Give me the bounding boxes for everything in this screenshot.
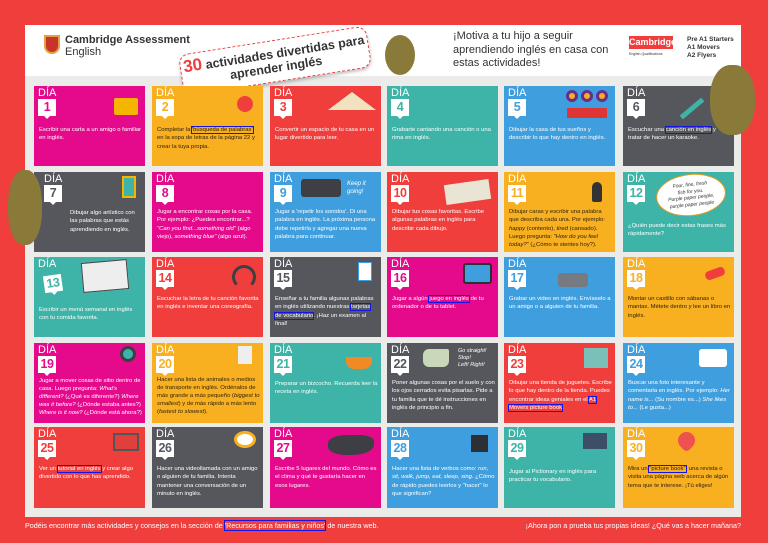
card 7: Dibujar algo artístico con las palabras que estás aprendiendo en inglés. <box>70 210 135 233</box>
card 12: 12 <box>630 186 642 200</box>
card 1: DÍA <box>38 87 56 99</box>
card 21: Preparar un bizcocho. Recuerda leer la receta en inglés. <box>275 381 378 395</box>
card 25: 25 <box>41 441 53 455</box>
speech bubble: tongue twister: purple paper people <box>670 199 714 210</box>
icon: heart and magazine <box>674 428 699 453</box>
card 27: DÍA <box>274 428 292 440</box>
title bubble: 30 actividades divertidas para <box>182 33 365 76</box>
card 13: 13 <box>46 275 60 291</box>
icon: microphone <box>680 98 704 119</box>
card 18 <box>623 257 734 337</box>
card 20: DÍA <box>156 344 174 356</box>
icon: world map <box>328 435 374 455</box>
speech bubble: tongue twister <box>654 170 728 220</box>
card 4: DÍA <box>391 87 409 99</box>
card 14: DÍA <box>156 258 174 270</box>
icon: tablet <box>113 433 139 451</box>
card 29: Jugar al Pictionary en inglés para practicar tu vocabulario. <box>509 469 596 483</box>
card 6 <box>623 86 734 166</box>
card 16: 16 <box>394 271 406 285</box>
card 23: Dibujar una tienda de juguetes. Escribe lo que hay dentro de la tienda. Puedes encontrar ideas geniales en el A1 Movers picture book. <box>509 380 612 411</box>
monkey left <box>8 170 42 245</box>
card 13 <box>34 257 145 337</box>
card 2: DÍA <box>156 87 174 99</box>
card 28 <box>387 427 498 508</box>
headline: estas actividades! <box>453 57 540 69</box>
icon: sneakers <box>423 349 449 367</box>
card 8 <box>152 172 263 252</box>
card 14 <box>152 257 263 337</box>
icon: tent <box>328 92 376 110</box>
speech bubble: tongue twister: Purple paper people, <box>668 193 715 203</box>
Cambridge English Qualifications logo <box>629 36 676 56</box>
card 12 <box>623 172 734 252</box>
card 24: DÍA <box>627 344 645 356</box>
card 22: Left! Right! <box>458 362 485 368</box>
card 18: Montar un castillo con sábanas o mantas. Métete dentro y lee un libro en inglés. <box>628 296 730 319</box>
card 10: Dibujar tus cosas favoritas. Escribe algunas palabras en inglés para describir cada dibujo. <box>392 209 484 232</box>
card 20: 20 <box>159 357 171 371</box>
card 7: 7 <box>50 186 56 200</box>
card 26: 26 <box>159 441 171 455</box>
card 5: 5 <box>514 100 520 114</box>
card 19: 19 <box>41 357 53 371</box>
icon: notes <box>471 435 488 452</box>
card 28: 28 <box>394 441 406 455</box>
card 9: DÍA <box>274 173 292 185</box>
card 30 <box>623 427 734 508</box>
card 16: Jugar a algún juego en inglés de tu ordenador o de tu tablet. <box>392 296 484 310</box>
exam levels <box>687 36 734 59</box>
card 24 <box>623 343 734 423</box>
card 22: DÍA <box>391 344 409 356</box>
card 11 <box>504 172 615 252</box>
card 13: Escribir un menú semanal en inglés con tu comida favorita. <box>39 307 132 321</box>
card 22: Stop! <box>458 355 471 361</box>
card 19: Jugar a mover cosas de sitio dentro de casa. Luego pregunta: What's different? (¿Qué es diferente?) Where was it before? (¿Dónde estaba antes?) Where is it now? (¿Dónde está ahora?) <box>39 378 142 416</box>
card 8: DÍA <box>156 173 174 185</box>
card 29 <box>504 427 615 508</box>
card 4: Grabarte cantando una canción o una rima en inglés. <box>392 127 491 141</box>
icon: computer screen <box>463 263 492 284</box>
icon: open book <box>81 259 129 293</box>
card 17: Grabar un video en inglés. Envíaselo a un amigo o a alguien de tu familia. <box>509 296 611 310</box>
exam levels: A1 Movers <box>687 44 720 51</box>
exam levels: Pre A1 Starters <box>687 36 734 43</box>
card 7: DÍA <box>44 173 62 185</box>
icon: light bulb <box>237 96 253 112</box>
card 22: Go straight! <box>458 348 486 354</box>
card 1: 1 <box>44 100 50 114</box>
card 5 <box>504 86 615 166</box>
icon: monkey with laptop <box>558 273 588 287</box>
headline: ¡Motiva a tu hijo a seguir <box>453 30 573 42</box>
card 8: Jugar a encontrar cosas por la casa. Por ejemplo: ¿Puedes encontrar...? "Can you find...something old" (algo viejo), something blue" (algo azul). <box>157 209 252 240</box>
card 28: DÍA <box>391 428 409 440</box>
card 3: DÍA <box>274 87 292 99</box>
card 8: 8 <box>162 186 168 200</box>
icon: magnifying glass <box>120 346 136 362</box>
card 23 <box>504 343 615 423</box>
card 23: DÍA <box>508 344 526 356</box>
card 24: 24 <box>630 357 642 371</box>
icon: camera <box>699 349 727 367</box>
footer right text: ¡Ahora pon a prueba tus propias ideas! ¿Qué vas a hacer mañana? <box>526 521 741 530</box>
card 2 <box>152 86 263 166</box>
icon: flashlight and sleeping bag <box>704 266 726 281</box>
icon: clipboard <box>358 262 372 281</box>
card 21: DÍA <box>274 344 292 356</box>
card 26: Hacer una videollamada con un amigo o alguien de tu familia. Intenta mantener una conversación de un minuto en inglés. <box>157 466 258 497</box>
card 15 <box>270 257 381 337</box>
card 11: DÍA <box>508 173 526 185</box>
card 4: 4 <box>397 100 403 114</box>
card 14: 14 <box>159 271 171 285</box>
card 18: DÍA <box>627 258 645 270</box>
card 20: Hacer una lista de animales o medios de transporte en inglés. Ordénalos de más grande a más pequeño (biggest to smallest) y de más rápido a más lento (fastest to slowest). <box>157 377 260 415</box>
card 16 <box>387 257 498 337</box>
logo: Cambridge Assessment English <box>44 34 190 58</box>
card 12: ¿Quién puede decir estas frases más rápidamente? <box>628 223 726 237</box>
monkey top (decorative character) <box>385 35 415 75</box>
card 30: Mira un "picture book", una revista o visita una página web acerca de algún tema que te interese. ¡Tú eliges! <box>628 466 728 489</box>
monkey right <box>710 65 755 135</box>
icon: speech bubble <box>234 431 256 448</box>
card 3: 3 <box>280 100 286 114</box>
card 24: Buscar una foto interesante y comentarla en inglés. Por ejemplo: Her name is... (Su nombre es...) She likes to... (Le gusta...) <box>628 380 730 411</box>
card 2: Completar la 'búsqueda de palabras' en la sopa de letras de la página 22 y crear la tuya propia. <box>157 127 255 150</box>
card 6: Escuchar una canción en inglés y tratar de hacer un karaoke. <box>628 127 716 141</box>
card 10: 10 <box>394 186 406 200</box>
footer left text: Podéis encontrar más actividades y consejos en la sección de 'Recursos para familias y niños' de nuestra web. <box>25 521 379 530</box>
white header panel <box>25 25 741 76</box>
card 11: 11 <box>511 186 523 200</box>
card 18: 18 <box>630 271 642 285</box>
card 10: DÍA <box>391 173 409 185</box>
icon: book and pencil <box>122 176 136 198</box>
card 13: DÍA <box>38 258 56 270</box>
grey content panel <box>25 76 741 517</box>
card 9: going! <box>347 189 363 195</box>
card 23: 23 <box>511 357 523 371</box>
card 22: 22 <box>394 357 406 371</box>
card 19: DÍA <box>38 344 56 356</box>
card 11: Dibujar caras y escribir una palabra que describa cada una. Por ejemplo: happy (contento), tired (cansado). Luego pregunta: "How do you feel today?" (¿Cómo te sientes hoy?). <box>509 209 605 248</box>
card 26: DÍA <box>156 428 174 440</box>
card 17 <box>504 257 615 337</box>
card 21 <box>270 343 381 423</box>
icon: ID cards <box>444 179 491 205</box>
card 12: DÍA <box>627 173 645 185</box>
headline: aprendiendo inglés en casa con <box>453 44 608 56</box>
logo: Cambridge Assessment English: English <box>65 46 101 58</box>
card 15: DÍA <box>274 258 292 270</box>
card 1: Escribir una carta a un amigo o familiar en inglés. <box>39 127 141 141</box>
card 28: Hacer una lista de verbos como: run, sit, walk, jump, eat, sleep, sing. ¿Cómo de rápido puedes leerlos y "hacer" lo que significan? <box>392 466 494 497</box>
icon: cassette player <box>301 179 341 197</box>
icon: video player <box>583 433 607 449</box>
card 5: DÍA <box>508 87 526 99</box>
Cambridge English Qualifications logo: English Qualifications <box>629 52 662 56</box>
card 3 <box>270 86 381 166</box>
card 30: DÍA <box>627 428 645 440</box>
card 27 <box>270 427 381 508</box>
card 17: DÍA <box>508 258 526 270</box>
card 27: Escribe 5 lugares del mundo. Cómo es el clima y qué te gustaría hacer en esos lugares. <box>275 466 377 489</box>
card 4 <box>387 86 498 166</box>
card 29: 29 <box>511 441 523 455</box>
card 27: 27 <box>277 441 289 455</box>
headline <box>453 30 608 69</box>
Cambridge English Qualifications logo: Cambridge <box>629 37 676 47</box>
icon: cooking pot <box>346 357 372 369</box>
card 14: Escuchar la letra de tu canción favorita en inglés e inventar una coreografía. <box>157 296 259 310</box>
icon: paper list <box>238 346 252 364</box>
card 21: 21 <box>277 357 289 371</box>
card 19 <box>34 343 145 423</box>
icon: flowers <box>566 90 608 118</box>
card 6: 6 <box>633 100 639 114</box>
card 2: 2 <box>162 100 168 114</box>
card 9: Jugar a 'repetir los sonidos'. Di una palabra en inglés. La próxima persona debe repetirla y agregar una nueva palabra para continuar. <box>275 209 375 240</box>
card 5: Dibujar la casa de tus sueños y describir lo que hay dentro en inglés. <box>509 127 605 141</box>
speech bubble: tongue twister: fish for you. <box>677 187 704 196</box>
icon: headphones <box>232 265 256 289</box>
title bubble <box>178 25 372 97</box>
card 15: 15 <box>277 271 289 285</box>
card 6: DÍA <box>627 87 645 99</box>
card 7 <box>34 172 145 252</box>
card 29: DÍA <box>508 428 526 440</box>
card 25 <box>34 427 145 508</box>
icon: person <box>592 182 602 202</box>
icon: envelope <box>114 98 138 115</box>
card 9 <box>270 172 381 252</box>
card 3: Convertir un espacio de tu casa en un lugar divertido para leer. <box>275 127 374 141</box>
exam levels: A2 Flyers <box>687 52 716 59</box>
card 9: 9 <box>280 186 286 200</box>
card 20 <box>152 343 263 423</box>
card 1 <box>34 86 145 166</box>
card 17: 17 <box>511 271 523 285</box>
icon: map and pencil <box>584 348 608 368</box>
card 22: Poner algunas cosas por el suelo y con los ojos cerrados evita pisarlas. Pide a tu familia que te dé instrucciones en inglés de principio a fin. <box>392 380 495 411</box>
card 16: DÍA <box>391 258 409 270</box>
card 15: Enseñar a tu familia algunas palabras en inglés utilizando nuestras tarjetas de vocabulario. ¡Haz un examen al final! <box>275 296 374 327</box>
card 9: Keep it <box>347 181 366 187</box>
card 26 <box>152 427 263 508</box>
speech bubble: tongue twister: Four, fine, fresh <box>672 180 708 190</box>
card 25: Ver un tutorial en inglés y crear algo divertido con lo que has aprendido. <box>39 466 133 480</box>
logo: Cambridge Assessment English: Cambridge Assessment <box>65 34 190 46</box>
title bubble: aprender inglés <box>229 54 323 82</box>
card 30: 30 <box>630 441 642 455</box>
card 25: DÍA <box>38 428 56 440</box>
card 22 <box>387 343 498 423</box>
card 10 <box>387 172 498 252</box>
